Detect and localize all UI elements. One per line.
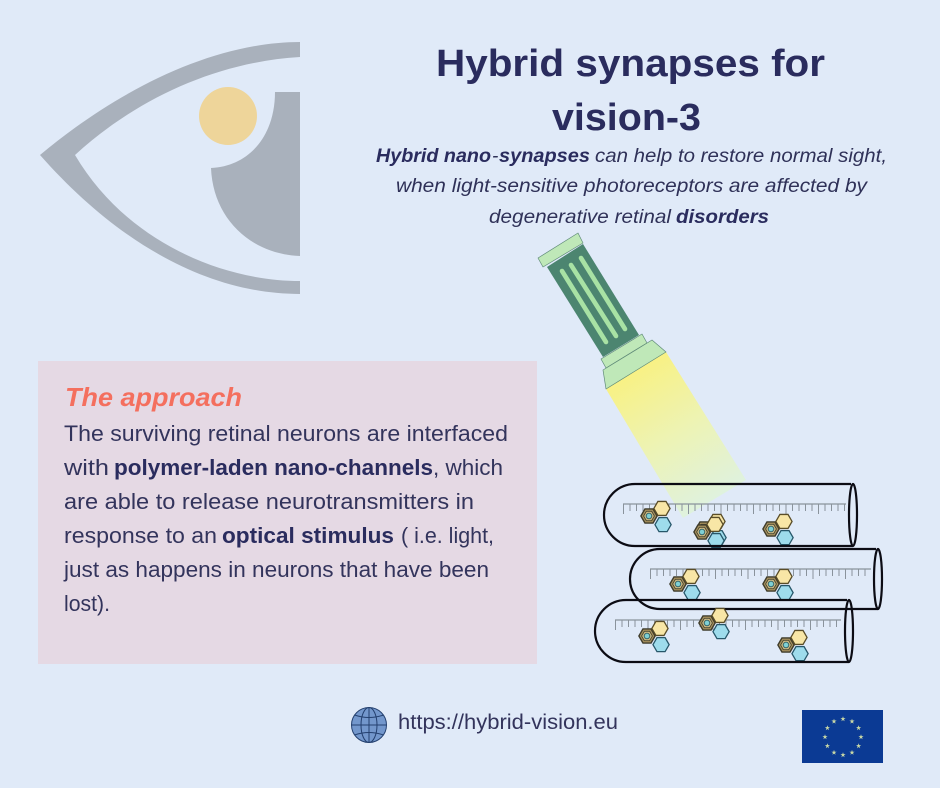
subtitle text: Hybrid nano: [376, 146, 491, 167]
molecules: [639, 608, 808, 661]
pupil dot: [199, 87, 257, 145]
ruler: [623, 504, 846, 509]
subtitle text: synapses: [499, 146, 590, 167]
panel background: [38, 361, 537, 664]
title: Hybrid synapses for: [436, 43, 825, 85]
icon: EU flag: [802, 710, 883, 763]
panel body text: , which: [433, 455, 503, 480]
subtitle text: -: [492, 146, 498, 167]
website link: https://hybrid-vision.eu: [398, 711, 618, 734]
flashlight head: [603, 340, 666, 389]
iris segment: [211, 92, 300, 256]
flashlight collar: [601, 334, 647, 368]
icon: globe: [352, 708, 386, 742]
panel body text: lost).: [64, 591, 110, 616]
ruler: [650, 569, 871, 574]
panel heading: The approach: [65, 382, 242, 412]
ruler: [615, 620, 841, 625]
panel body text: with: [63, 455, 109, 480]
flashlight body: [547, 244, 639, 357]
test tube 2: [630, 549, 882, 609]
panel body text: The surviving retinal neurons are interfaced: [64, 421, 508, 446]
panel: the approach: [38, 361, 537, 664]
molecules: [670, 569, 793, 600]
light beam: [606, 352, 746, 518]
panel body text: are able to release neurotransmitters in: [64, 489, 474, 514]
subtitle text: disorders: [676, 207, 769, 228]
subtitle text: [376, 146, 887, 228]
panel body text: response to an: [64, 523, 217, 548]
panel body text: ( i.e. light,: [401, 523, 494, 548]
panel body text: [63, 421, 508, 616]
subtitle text: when light-sensitive photoreceptors are affected by: [396, 176, 869, 197]
panel body text: polymer-laden nano-channels: [114, 455, 433, 480]
eye logo: [40, 42, 300, 294]
title: [436, 43, 825, 139]
title: vision-3: [552, 97, 701, 139]
test tube 3: [595, 600, 853, 662]
tube outline: [595, 600, 853, 662]
eye outline: [40, 42, 300, 294]
icon: flashlight: [538, 233, 666, 389]
tube outline: [630, 549, 882, 609]
flashlight end cap: [538, 233, 583, 267]
flashlight grip stripes: [562, 258, 625, 342]
panel body text: just as happens in neurons that have been: [63, 557, 489, 582]
subtitle text: can help to restore normal sight,: [595, 146, 887, 167]
molecules: [641, 501, 793, 548]
panel body text: optical stimulus: [222, 523, 394, 548]
test tube 1: [604, 484, 857, 548]
tube outline: [604, 484, 857, 546]
subtitle text: degenerative retinal: [489, 207, 672, 228]
